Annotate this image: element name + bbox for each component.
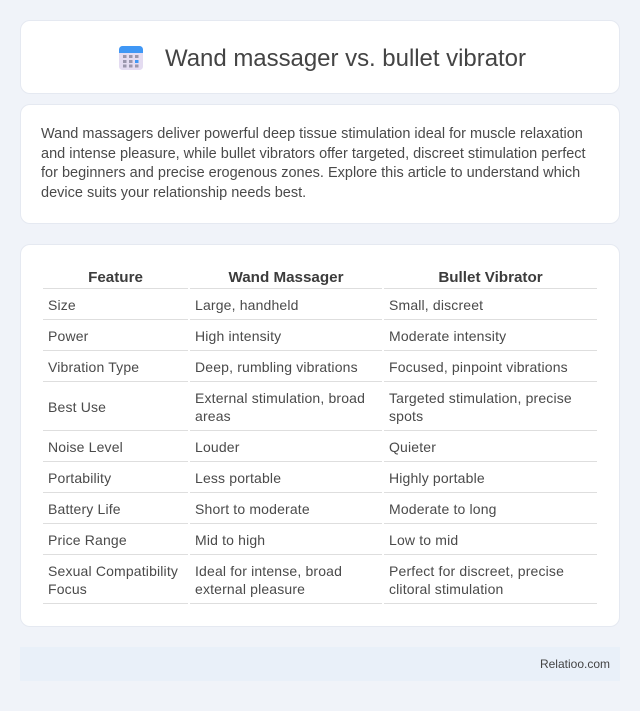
comparison table: Perfect for discreet, precise bbox=[389, 563, 564, 579]
comparison table: Large, handheld bbox=[195, 297, 299, 313]
title: Wand massager vs. bullet vibrator bbox=[165, 45, 526, 72]
icon: calendar bbox=[119, 46, 143, 70]
header row: Bullet Vibrator bbox=[438, 269, 543, 286]
comparison table: High intensity bbox=[195, 328, 281, 344]
comparison table: Vibration Type bbox=[48, 359, 139, 375]
comparison table: Price Range bbox=[48, 532, 127, 548]
comparison table: Less portable bbox=[195, 470, 281, 486]
comparison table: areas bbox=[195, 408, 231, 424]
comparison table: Deep, rumbling vibrations bbox=[195, 359, 358, 375]
comparison table: Battery Life bbox=[48, 501, 121, 517]
comparison table: Small, discreet bbox=[389, 297, 483, 313]
comparison table: Noise Level bbox=[48, 439, 123, 455]
panel: comparison table card bbox=[20, 244, 620, 627]
comparison table: Moderate to long bbox=[389, 501, 497, 517]
comparison table: Targeted stimulation, precise bbox=[389, 390, 572, 406]
comparison table: Size bbox=[48, 297, 76, 313]
comparison table: Moderate intensity bbox=[389, 328, 506, 344]
intro paragraph bbox=[41, 126, 586, 200]
comparison table: Low to mid bbox=[389, 532, 458, 548]
header row: Wand Massager bbox=[228, 269, 344, 286]
intro paragraph: and intense pleasure, while bullet vibrators offer targeted, discreet stimulation perfect bbox=[41, 146, 586, 162]
comparison table: external pleasure bbox=[195, 581, 305, 597]
comparison table: Focus bbox=[48, 581, 87, 597]
header row: Feature bbox=[88, 269, 143, 286]
panel: intro text bbox=[20, 104, 620, 224]
comparison table: Power bbox=[48, 328, 88, 344]
comparison table: Portability bbox=[48, 470, 111, 486]
comparison table: Ideal for intense, broad bbox=[195, 563, 342, 579]
comparison table: Short to moderate bbox=[195, 501, 310, 517]
footer bar bbox=[20, 647, 620, 681]
comparison table: Focused, pinpoint vibrations bbox=[389, 359, 568, 375]
intro paragraph: device suits your relationship needs best. bbox=[41, 184, 306, 200]
header row bbox=[43, 269, 597, 289]
comparison table: spots bbox=[389, 408, 423, 424]
comparison table: Louder bbox=[195, 439, 240, 455]
intro paragraph: for beginners and precise erogenous zones. Explore this article to understand which bbox=[41, 165, 580, 181]
panel: title card bbox=[20, 20, 620, 94]
comparison table: Highly portable bbox=[389, 470, 485, 486]
comparison table: Quieter bbox=[389, 439, 436, 455]
comparison table: clitoral stimulation bbox=[389, 581, 503, 597]
intro paragraph: Wand massagers deliver powerful deep tissue stimulation ideal for muscle relaxation bbox=[41, 126, 583, 142]
comparison table: Best Use bbox=[48, 399, 106, 415]
comparison table: Sexual Compatibility bbox=[48, 563, 178, 579]
comparison table: External stimulation, broad bbox=[195, 390, 365, 406]
comparison table: Mid to high bbox=[195, 532, 265, 548]
footer credit: Relatioo.com bbox=[540, 657, 610, 671]
